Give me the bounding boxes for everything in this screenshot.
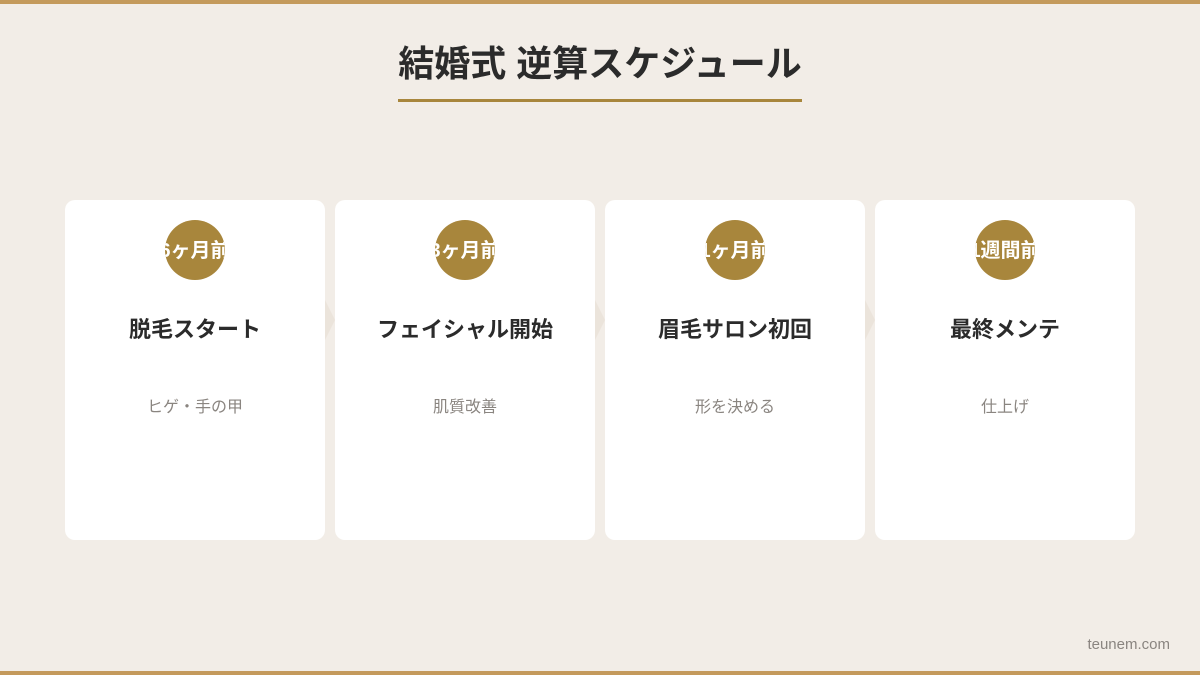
heading: 眉毛サロン初回: [658, 317, 812, 342]
arrow: [595, 300, 605, 340]
badge: 1週間前: [975, 220, 1035, 280]
panel: 1 month: [605, 200, 865, 540]
panel: 1 week: [875, 200, 1135, 540]
footer credit: teunem.com: [1087, 636, 1170, 653]
panel: 6 months: [65, 200, 325, 540]
title: 結婚式 逆算スケジュール: [398, 43, 802, 84]
panel: 3 months: [335, 200, 595, 540]
text: ヒゲ・手の甲: [147, 399, 243, 416]
badge: 1ヶ月前: [705, 220, 765, 280]
text: 肌質改善: [433, 399, 497, 416]
arrow: [325, 300, 335, 340]
arrow: [865, 300, 875, 340]
heading: 最終メンテ: [950, 317, 1060, 342]
text: 形を決める: [695, 399, 775, 416]
heading: 脱毛スタート: [129, 317, 261, 342]
badge: 3ヶ月前: [435, 220, 495, 280]
badge: 6ヶ月前: [165, 220, 225, 280]
text: 仕上げ: [981, 399, 1029, 416]
heading: フェイシャル開始: [377, 317, 553, 342]
